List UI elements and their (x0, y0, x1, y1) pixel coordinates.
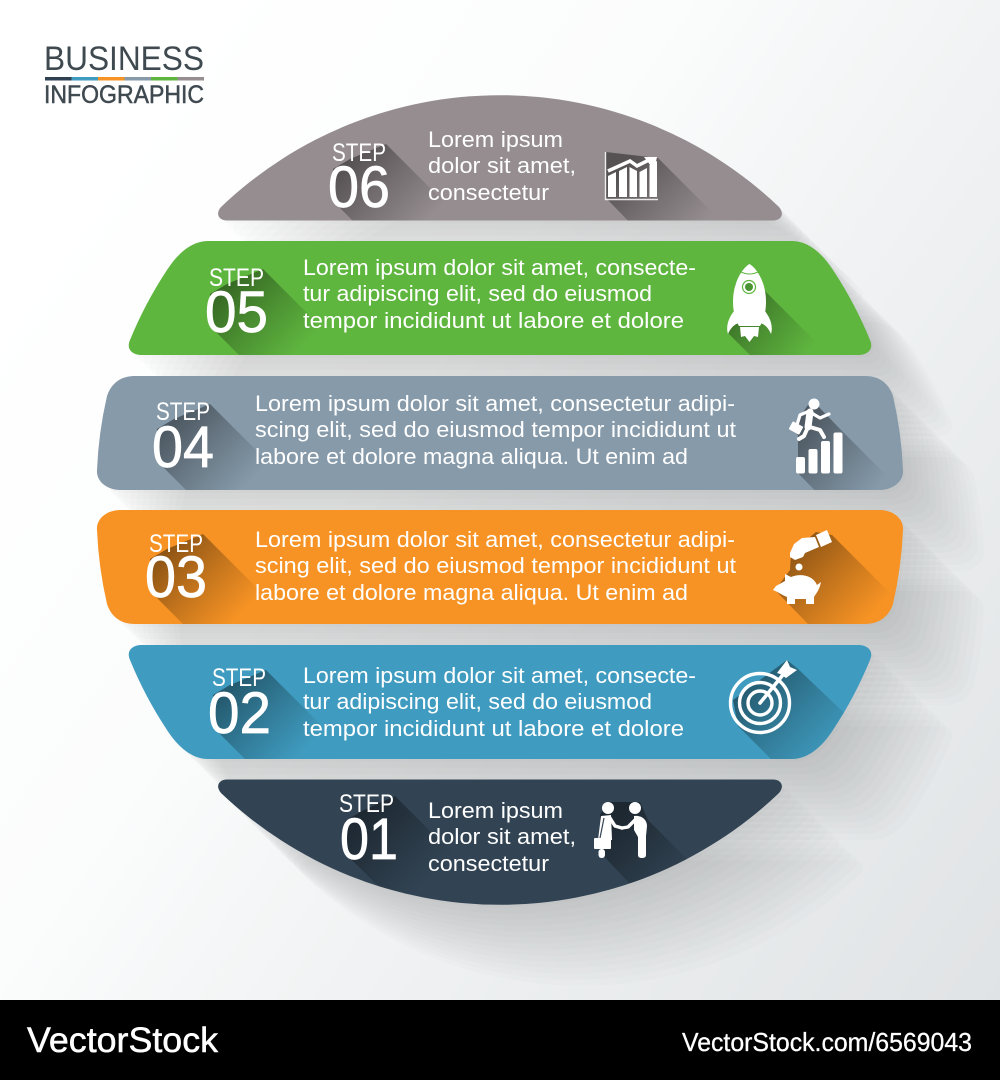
long shadows (157, 404, 878, 490)
footer logo: VectorStock (27, 1021, 219, 1060)
icon: target with arrow (730, 660, 797, 732)
footer bar (0, 1000, 1000, 1080)
band shape (97, 510, 903, 624)
long shadows (150, 532, 885, 624)
step number: 02 (208, 681, 271, 746)
description: Lorem ipsum dolor sit amet, consectetur adipi- (255, 391, 735, 416)
description: consectetur (428, 851, 549, 876)
step label: STEP (209, 264, 264, 292)
icon: growth chart (606, 152, 658, 200)
description: scing elit, sed do eiusmod tempor incididunt ut (255, 553, 736, 578)
description: tur adipiscing elit, sed do eiusmod (303, 689, 652, 714)
description: tur adipiscing elit, sed do eiusmod (303, 281, 652, 306)
band shape (129, 241, 871, 355)
title word: business: BUSINESS (44, 40, 204, 78)
panel: step 06 (218, 95, 782, 220)
description: tempor incididunt ut labore et dolore (303, 716, 684, 741)
long shadow of circle bands (100, 98, 984, 986)
footer url: VectorStock.com/6569043 (682, 1027, 972, 1057)
description: Lorem ipsum dolor sit amet, consecte- (303, 663, 696, 688)
step label: STEP (339, 790, 394, 818)
panel: step 01 (218, 780, 782, 916)
description (303, 255, 696, 333)
description: labore et dolore magna aliqua. Ut enim ad (255, 444, 688, 469)
description: labore et dolore magna aliqua. Ut enim ad (255, 580, 688, 605)
band shape (129, 645, 871, 759)
step number: 04 (152, 415, 214, 480)
step label: STEP (149, 530, 203, 558)
description: tempor incididunt ut labore et dolore (303, 308, 684, 333)
description: Lorem ipsum (428, 127, 563, 152)
description (255, 527, 736, 605)
long shadows (210, 264, 808, 355)
step label: STEP (212, 664, 266, 692)
panel: step 02 (128, 645, 872, 759)
long shadows (213, 660, 844, 759)
title colour stripe (45, 77, 204, 80)
title word: infographic: INFOGRAPHIC (44, 81, 204, 109)
title: business infographic (44, 40, 204, 109)
icon: hand dropping coin in piggy bank (773, 530, 832, 604)
panel: step 03 (96, 510, 904, 624)
icon: businessmen handshake (594, 802, 647, 858)
step label: STEP (156, 398, 210, 426)
step label: STEP (332, 139, 386, 167)
long shadows (333, 144, 704, 220)
description: Lorem ipsum dolor sit amet, consectetur adipi- (255, 527, 735, 552)
description (428, 127, 576, 205)
description (255, 391, 736, 469)
step number: 03 (145, 545, 207, 610)
description (303, 663, 696, 741)
description: consectetur (428, 180, 549, 205)
step number: 01 (340, 807, 398, 872)
step number: 06 (328, 155, 390, 220)
panel: step 04 (96, 376, 903, 490)
icon: rocket (727, 264, 772, 342)
description (428, 798, 576, 876)
band shape (97, 376, 903, 490)
long shadows (345, 796, 680, 889)
description: Lorem ipsum (428, 798, 563, 823)
step number: 05 (205, 280, 268, 345)
panel: step 05 (128, 241, 872, 355)
description: dolor sit amet, (428, 153, 576, 178)
band shape (218, 780, 782, 905)
band shape (218, 95, 782, 220)
description: Lorem ipsum dolor sit amet, consecte- (303, 255, 696, 280)
icon: running businessman on rising bars (789, 398, 842, 474)
description: dolor sit amet, (428, 824, 576, 849)
description: scing elit, sed do eiusmod tempor incididunt ut (255, 417, 736, 442)
